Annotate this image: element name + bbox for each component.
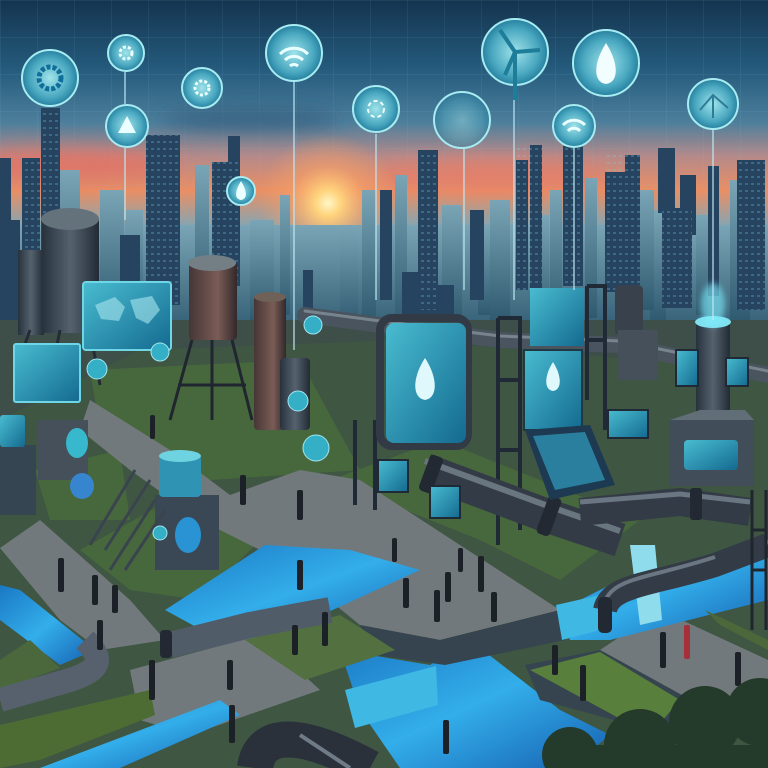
ground base xyxy=(0,320,768,768)
lawn: lower strips xyxy=(0,610,768,768)
water channel edges xyxy=(360,610,700,738)
screen: small signs xyxy=(378,350,748,518)
bubble glyphs xyxy=(39,30,728,200)
water tower centre with rust tank xyxy=(170,255,252,420)
walkways xyxy=(0,400,768,735)
pipe flanges xyxy=(160,454,702,658)
green lawn: left gardens xyxy=(35,360,640,600)
people silhouettes xyxy=(58,415,741,754)
screen: droplet panel 2 xyxy=(524,350,582,430)
screen: upper panel xyxy=(530,288,584,346)
icon bubbles xyxy=(22,19,738,205)
stairs xyxy=(90,470,165,570)
glowing orbs on tanks xyxy=(87,316,329,540)
waterfalls xyxy=(345,545,662,728)
right edge scaffold xyxy=(752,490,766,630)
skyline: lit windows xyxy=(22,108,765,310)
left cyan tower machines xyxy=(0,415,219,570)
screen: large centre droplet panel xyxy=(380,318,468,446)
main pipe run xyxy=(0,461,768,768)
water tanks left xyxy=(16,208,100,385)
skyline: near towers xyxy=(0,108,765,330)
pipes: back horizontal xyxy=(305,311,768,375)
sky background xyxy=(0,0,768,340)
right chimney machine xyxy=(670,283,754,486)
screen: world map xyxy=(83,282,171,350)
back machine right xyxy=(615,285,658,380)
trees bottom right xyxy=(542,678,768,768)
tall pylons xyxy=(355,286,605,545)
skyline: far buildings xyxy=(0,165,768,335)
screen: control console xyxy=(525,425,615,500)
sensor poles xyxy=(125,72,713,350)
water channels xyxy=(0,540,768,768)
second tank pair xyxy=(254,292,310,430)
screen: left small xyxy=(14,344,80,402)
